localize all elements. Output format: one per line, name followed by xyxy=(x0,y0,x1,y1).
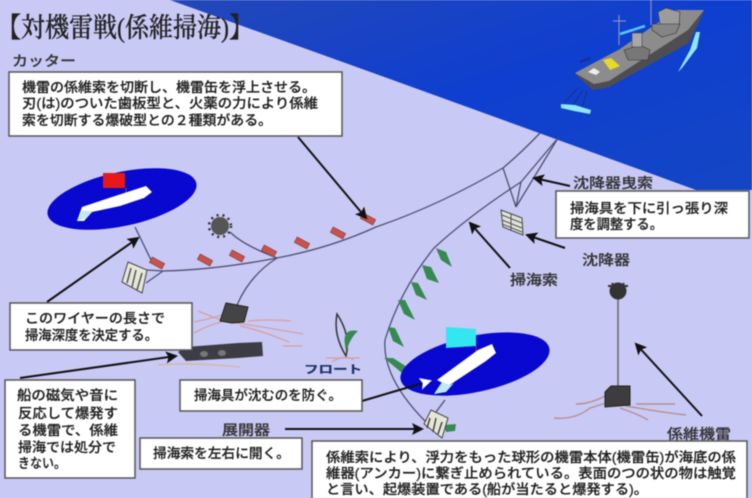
callout: influence mine: きない。 xyxy=(18,456,66,471)
towed sweep gear at stern xyxy=(562,88,587,108)
callout: influence mine: る機雷で、係維 xyxy=(18,423,119,438)
sea surface xyxy=(170,0,752,190)
cyan paravane xyxy=(395,321,555,407)
depressor xyxy=(501,210,523,235)
callout: otter xyxy=(140,438,302,469)
callout: wire length: このワイヤーの長さで xyxy=(25,311,165,326)
callout: depressor tow wire: 度を調整する。 xyxy=(570,217,663,232)
cut mine xyxy=(209,215,231,237)
float plant xyxy=(326,314,360,362)
label: cutter: カッター xyxy=(12,53,76,69)
red paravane xyxy=(42,157,202,241)
minesweeping ship xyxy=(561,0,704,114)
callout: influence mine: 反応して爆発す xyxy=(18,406,118,421)
callout: float xyxy=(180,380,362,411)
label: otter: 展開器 xyxy=(222,422,270,438)
green floats xyxy=(384,248,456,432)
moored mine xyxy=(554,282,686,420)
callout: influence mine: 船の磁気や音に xyxy=(17,387,118,403)
ship wake xyxy=(678,32,700,72)
otter left xyxy=(122,262,147,293)
sinker with roots xyxy=(194,303,303,346)
callout: wire length xyxy=(10,303,192,350)
arrow to float xyxy=(362,381,430,401)
callout: wire length: 掃海深度を決定する。 xyxy=(25,327,158,343)
callout: influence mine: 掃海では処分で xyxy=(18,439,116,455)
callout: float: 掃海具が沈むのを防ぐ。 xyxy=(194,387,342,403)
ground mine xyxy=(158,342,263,367)
otter bottom xyxy=(424,410,448,438)
label: depressor tow wire: 沈降器曳索 xyxy=(573,175,653,191)
label: moored mine: 係維機雷 xyxy=(667,426,731,442)
callout: otter: 掃海索を左右に開く。 xyxy=(153,445,290,461)
callout: moored mine: 維器(アンカー)に繋ぎ止められている。表面のつの状の物は触覚 xyxy=(326,465,736,481)
cutters xyxy=(149,213,376,269)
label: sweep wire: 掃海索 xyxy=(510,272,558,288)
callout: cutter: 索を切断する爆破型との２種類がある。 xyxy=(22,112,272,128)
float label: フロート xyxy=(304,364,362,376)
callout: moored mine: 係維索により、浮力をもった球形の機雷本体(機雷缶)が海底の係 xyxy=(326,449,737,465)
callout: cutter: 機雷の係維索を切断し、機雷缶を浮上させる。 xyxy=(22,79,316,95)
callout: cutter xyxy=(9,72,342,136)
callout: cutter: 刃(は)のついた歯板型と、火薬の力により係維 xyxy=(22,96,319,111)
callout: depressor tow wire: 掃海具を下に引っ張り深 xyxy=(570,200,729,216)
arrows xyxy=(20,137,702,429)
callout: moored mine: と言い、起爆装置である(船が当たると爆発する)。 xyxy=(326,481,648,497)
callout: influence mine xyxy=(5,380,135,478)
callout: moored mine xyxy=(312,441,747,498)
sweep wires xyxy=(135,133,558,427)
label: depressor: 沈降器 xyxy=(582,252,630,268)
callout: depressor tow wire xyxy=(556,191,749,238)
title: 【対機雷戦(係維掃海)】 xyxy=(0,13,253,43)
